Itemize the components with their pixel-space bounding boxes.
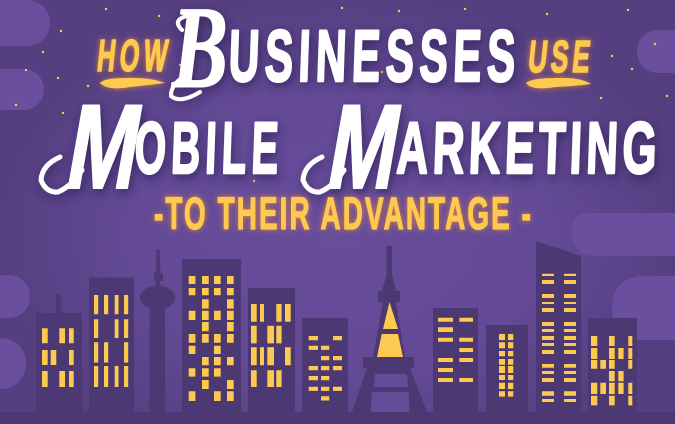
title	[41, 0, 658, 239]
stars	[15, 7, 668, 182]
heading: Use: USE	[526, 32, 593, 82]
heading: Businesses: USINESSES	[227, 15, 517, 97]
heading: How: HOW	[95, 30, 171, 81]
building 8	[536, 241, 581, 412]
building 1	[36, 294, 82, 412]
building 7	[486, 325, 528, 412]
building 4	[248, 288, 295, 412]
building 2	[89, 278, 134, 412]
heading: Mobile	[41, 80, 280, 214]
building 3	[182, 259, 241, 412]
tv tower	[140, 249, 175, 412]
building 5	[302, 318, 348, 412]
heading: Mobile: OBILE	[133, 109, 280, 189]
subtitle: -TO THEIR ADVANTAGE -	[154, 188, 531, 239]
heading: Marketing: ARKETING	[395, 106, 658, 189]
heading: Mobile: M	[58, 80, 152, 214]
eiffel tower	[352, 246, 427, 412]
ground	[0, 412, 675, 424]
city skyline	[0, 241, 675, 424]
building 9	[588, 318, 637, 412]
heading: Marketing	[303, 80, 658, 214]
building 6	[433, 308, 478, 412]
heading: Marketing: M	[319, 80, 411, 214]
heading: Businesses	[171, 0, 517, 113]
